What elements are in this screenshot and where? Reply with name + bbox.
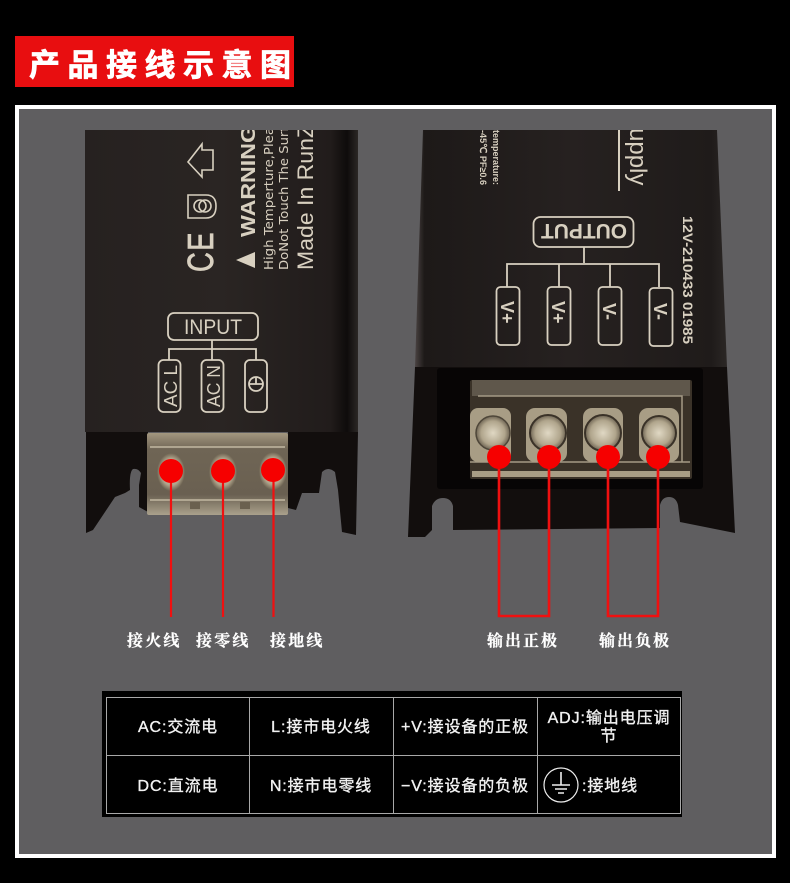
- label: live wire: 接火线: [127, 631, 182, 650]
- warning text: High Temperture,Plea: [261, 127, 276, 270]
- callout lines: input terminals: [159, 458, 285, 617]
- warning text: Made In RunZ: [293, 124, 318, 270]
- table cells: :接地线: [582, 777, 638, 795]
- title banner: 产品接线示意图: [29, 40, 298, 85]
- icon: safety mark: [188, 195, 216, 218]
- icon: ground symbol: [544, 768, 578, 802]
- terminal block: [147, 433, 288, 515]
- table cells: N:接市电零线: [270, 777, 372, 795]
- table cells: L:接市电火线: [271, 718, 371, 736]
- legend table: [102, 691, 682, 817]
- panel: input side device: [85, 124, 358, 535]
- table cells: DC:直流电: [138, 777, 218, 795]
- output label text: V-: [599, 303, 619, 320]
- device lower housing: [408, 367, 735, 537]
- warning text: DoNot Touch The Surf: [276, 126, 291, 270]
- device print top: 12V-210433 01985: [680, 216, 695, 345]
- table cells: +V:接设备的正极: [401, 718, 529, 736]
- input label text: AC N: [204, 365, 224, 407]
- label: output positive: 输出正极: [487, 631, 559, 650]
- device body: [415, 130, 727, 367]
- callout lines: output terminals: [487, 445, 670, 616]
- input label text: [161, 316, 242, 407]
- warning text: WARNING: [238, 125, 260, 237]
- icon: recycle arrow: [188, 144, 213, 177]
- table cells: 节: [601, 727, 617, 745]
- output label text: V-: [650, 303, 670, 320]
- icon: CE mark: CE: [180, 231, 221, 272]
- input label text: INPUT: [184, 316, 242, 339]
- table cells: AC:交流电: [138, 718, 218, 736]
- table cells: −V:接设备的负极: [401, 777, 529, 795]
- table cells: ADJ:输出电压调: [548, 709, 670, 727]
- device print top: temperature:: [490, 130, 501, 185]
- output label text: [497, 219, 670, 324]
- device print top: -45℃ PF≥0.6: [477, 130, 488, 185]
- terminal block: [470, 380, 692, 479]
- panel: output side device: [408, 128, 735, 537]
- output label text: OUTPUT: [541, 219, 627, 242]
- device legs: [86, 432, 358, 535]
- input label tree: [158, 313, 267, 412]
- output label tree: [496, 217, 672, 346]
- label: neutral wire: 接零线: [196, 631, 251, 650]
- device print top: [477, 128, 695, 345]
- label: ground wire: 接地线: [270, 631, 325, 650]
- table cells: [138, 709, 670, 795]
- input label text: AC L: [161, 365, 181, 407]
- device print top: upply: [624, 128, 651, 185]
- output label text: V+: [548, 301, 568, 324]
- warning text: [236, 130, 313, 269]
- terminal window: [437, 368, 703, 489]
- label: output negative: 输出负极: [599, 631, 671, 650]
- output label text: V+: [497, 301, 517, 324]
- device body: [85, 130, 358, 432]
